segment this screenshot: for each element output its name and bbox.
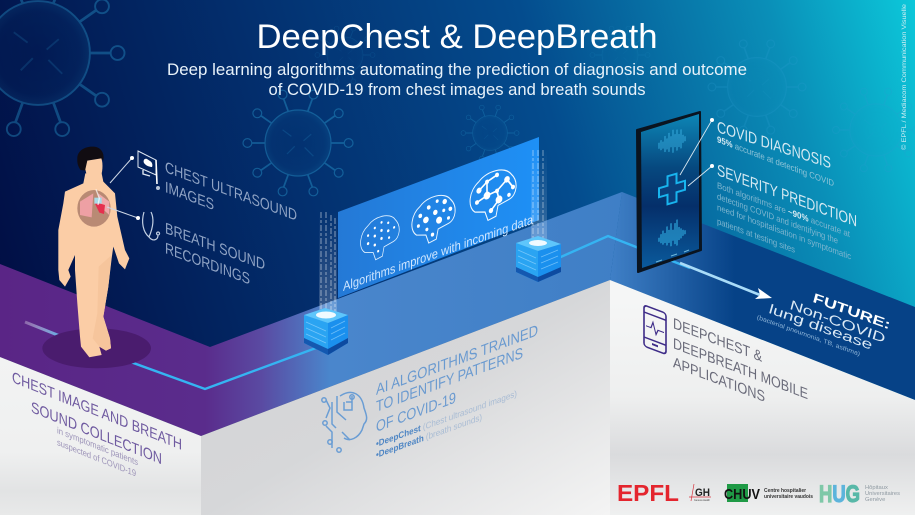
- logo: CHUV: CHUV: [724, 486, 760, 503]
- text: breath sound recordings: RECORDINGS: [165, 239, 250, 288]
- text: AI algorithms: AI ALGORITHMS TRAINED: [376, 322, 538, 399]
- text: covid diagnosis: COVID DIAGNOSIS: [717, 118, 831, 172]
- logo: HUG: [819, 481, 900, 508]
- text: future non-covid lung disease: [757, 290, 890, 358]
- walls: [0, 280, 915, 515]
- logo: GH: Geneva Health: [694, 498, 710, 502]
- logo: EPFL: EPFL: [617, 480, 679, 506]
- cross icon: [659, 171, 685, 207]
- text: future non-covid lung disease: lung disease: [769, 301, 872, 354]
- text: future non-covid lung disease: Non-COVID: [790, 297, 885, 347]
- connector: severity prediction: [688, 164, 714, 186]
- panel: chest image and breath sound collection text: suspected of COVID-19: [57, 437, 136, 479]
- subtitle: [167, 60, 747, 99]
- text: chest ultrasound images: CHEST ULTRASOUND: [165, 158, 297, 225]
- logo: CHUV: universitaire vaudois: [764, 494, 813, 500]
- panel: chest image and breath sound collection text: CHEST IMAGE AND BREATH: [12, 369, 182, 454]
- text: severity prediction: patients at testing sites: [717, 216, 795, 255]
- brain 2: [412, 192, 455, 247]
- subtitle: of COVID-19 from chest images and breath sounds: [268, 80, 646, 99]
- data beam 1: [319, 212, 337, 312]
- logo: GH: GH: [695, 487, 710, 499]
- waveform bottom: [659, 217, 685, 251]
- icon: ultrasound monitor: [138, 151, 160, 190]
- text: severity prediction: need for hospitalisation in symptomatic: [717, 202, 851, 262]
- text: mobile applications: DEEPBREATH MOBILE: [673, 335, 808, 403]
- text: mobile applications: DEEPCHEST &: [673, 315, 763, 366]
- server cube 2: [516, 236, 561, 282]
- logo: HUG: Genève: [865, 497, 885, 503]
- connector: covid diagnosis: [680, 118, 714, 175]
- panel: algorithms improve: [338, 137, 539, 298]
- waveform top: [659, 126, 685, 157]
- icon: mobile app: [644, 305, 666, 354]
- text: future non-covid lung disease: (bacterial pneumonia, TB, asthma): [757, 314, 860, 358]
- arrow: future direction: [755, 288, 772, 299]
- phone nav icons: [656, 250, 689, 262]
- text: future non-covid lung disease: FUTURE:: [813, 290, 890, 334]
- phone: [637, 112, 701, 272]
- logo: HUG: Hôpitaux: [865, 485, 888, 491]
- logo: HUG: HUG: [819, 481, 860, 508]
- logo: GH: [689, 484, 711, 502]
- subtitle: Deep learning algorithms automating the prediction of diagnosis and outcome: [167, 60, 747, 79]
- panel: chest image and breath sound collection text: SOUND COLLECTION: [31, 399, 162, 468]
- text: severity prediction: SEVERITY PREDICTION: [717, 160, 857, 231]
- connector: breath sounds: [107, 207, 140, 220]
- title: DeepChest & DeepBreath: [256, 18, 658, 56]
- icon: AI head: [322, 392, 367, 452]
- logo: HUG: Universitaires: [865, 491, 900, 497]
- text: severity prediction: detecting COVID and identifying the: [717, 191, 838, 246]
- text: chest ultrasound images: IMAGES: [165, 178, 214, 214]
- text: AI algorithms: •DeepChest (Chest ultrasound images): [376, 388, 517, 449]
- text: covid diagnosis: 95% accurate at detecting COVID: [717, 134, 834, 189]
- copyright: © EPFL / Mediacom Communication Visuelle: [901, 3, 908, 150]
- virus illustrations: [0, 0, 915, 196]
- text: severity prediction: Both algorithms are ~90% accurate at: [717, 180, 850, 239]
- text: chest ultrasound images: [165, 158, 297, 225]
- panel: chest image and breath sound collection text: in symptomatic patients: [57, 425, 138, 467]
- text: AI algorithms: TO IDENTIFY PATTERNS: [376, 344, 523, 416]
- data beam 2: [531, 150, 547, 242]
- platform surfaces: [0, 192, 915, 436]
- server cube 1: [304, 308, 348, 355]
- person illustration: [42, 147, 151, 368]
- text: breath sound recordings: BREATH SOUND: [165, 219, 265, 274]
- brain 3: [470, 166, 516, 225]
- data flow line: [25, 236, 760, 389]
- text: AI algorithms: [376, 322, 538, 460]
- text: mobile applications: [673, 315, 808, 406]
- logo: CHUV: Centre hospitalier: [764, 488, 806, 494]
- panel caption: Algorithms improve with incoming data: [343, 212, 533, 294]
- text: AI algorithms: •DeepBreath (breath sounds): [376, 412, 482, 460]
- text: AI algorithms: OF COVID-19: [376, 389, 456, 436]
- brain 1: [361, 212, 399, 263]
- connector: chest ultrasound: [110, 156, 134, 183]
- icon: stethoscope: [143, 212, 160, 240]
- text: severity prediction: [717, 160, 857, 262]
- text: mobile applications: APPLICATIONS: [673, 354, 765, 406]
- logo: CHUV: [724, 484, 813, 503]
